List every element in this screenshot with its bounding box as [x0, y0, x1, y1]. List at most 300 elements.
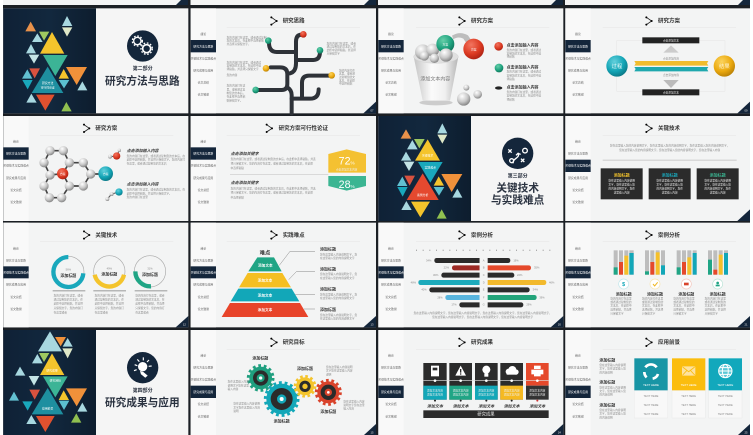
chart: pyramid: 添加文本: [258, 307, 273, 312]
text blocks: 择粘贴: [507, 97, 515, 101]
panel: three dark boxes: 添加标题: [710, 171, 726, 177]
sidebar navigation: 研究方法与思路: [381, 44, 401, 48]
ring labels: [60, 266, 158, 278]
heading: [603, 16, 736, 27]
gear labels: 文字您在这里输入内容: [326, 369, 353, 373]
text columns: 在这里或者: [135, 311, 149, 315]
text blocks: 点击添加输入内容: [507, 63, 539, 69]
chart: bucket of spheres: [414, 33, 484, 106]
text blocks: 此框中选择粘贴，并选择: [327, 48, 356, 52]
sidebar navigation: 研究成果与应用: [193, 68, 213, 72]
panel: three dark boxes: 文字，您在这里输入您: [656, 183, 683, 187]
text columns: 或者通过复制您的: [673, 300, 695, 304]
heading: [227, 16, 360, 27]
heading: 研究方案: [95, 124, 118, 132]
sidebar navigation: 绪论: [13, 246, 19, 250]
chart: butterfly bars: F: [483, 295, 485, 299]
heading: 实践难点: [283, 231, 305, 239]
corner page mark: [737, 102, 750, 113]
sidebar navigation: 论文总结: [385, 402, 397, 406]
sidebar navigation: 研究成果与应用: [381, 390, 401, 394]
text columns: 您的内容打在这里，或者: [54, 293, 83, 297]
callouts: 您在这里输入内容说明文字，您: [320, 252, 358, 256]
chart: pyramid: 添加文本: [258, 262, 273, 267]
sidebar navigation: 论文致谢: [198, 200, 209, 204]
results bar: 研究成果: [477, 411, 495, 418]
heading: 关键技术: [658, 124, 680, 132]
diagram: process loop: 结果: [719, 62, 730, 70]
slide: case analysis columns: [565, 223, 750, 327]
intro text: 您在这里输入您的内容说明文字，您在这里输入您的内容说明文字，您在这里输入内容: [619, 148, 720, 152]
text columns: 文本后，在此框中: [705, 304, 726, 308]
text blocks: 择粘贴，并选择只保留文字: [227, 67, 259, 71]
panel: dark triangle mosaic: 关键技术: [422, 154, 433, 158]
sidebar navigation: 研究方法与思路: [193, 259, 213, 263]
panel: three feature cards: TEXT HERE: [718, 403, 733, 407]
text columns: 只保留文字。您的内容打: [95, 306, 124, 310]
text columns: 只保留文字。您的内容打: [135, 306, 165, 310]
panel: three feature cards: [634, 358, 742, 418]
sidebar navigation: [565, 8, 591, 113]
panel: five result cards: 添加文本内容: [529, 389, 546, 393]
icon: printer: [531, 366, 543, 376]
sidebar navigation: 绪论: [575, 353, 581, 357]
heading: 关键技术: [95, 231, 118, 239]
text blocks: 点击添加输入内容: [507, 84, 539, 90]
text blocks: [599, 356, 626, 419]
sidebar navigation: 论文致谢: [572, 414, 584, 418]
sidebar navigation: 研究成果与应用: [568, 283, 588, 287]
sidebar navigation: [191, 116, 216, 221]
panel: three dark boxes: 文字，您在这里输入您: [608, 183, 635, 187]
ring labels: 49%: [107, 266, 113, 270]
sidebar navigation: 关键技术与实践难点: [378, 56, 404, 60]
ring labels: 添加标题: [60, 272, 76, 278]
panel: five result cards: 添加文本内容: [478, 393, 495, 397]
text blocks: 此框中选择粘贴，并选择只保留文字。您的内容打: [127, 158, 185, 162]
text blocks: 点击添加输入内容: [127, 148, 160, 153]
icon: light bulb: [127, 352, 158, 383]
text blocks: 点击添加关键字: [231, 151, 260, 156]
sidebar navigation: 研究方法与思路: [568, 366, 588, 370]
panel: dark triangle mosaic: 应用前景: [42, 407, 53, 411]
corner page mark: 25: [745, 430, 748, 434]
sidebar navigation: 研究方法与思路: [381, 259, 401, 263]
card captions: 添加文本: [478, 404, 495, 409]
sidebar navigation: 论文总结: [572, 402, 584, 406]
chart: butterfly bars: 22%: [444, 266, 450, 270]
heading: 案例分析: [658, 231, 680, 239]
icons: round badges: $: [622, 282, 625, 288]
chart: percentage badges: 72%: [339, 156, 355, 168]
text blocks: 贴保留文字。: [227, 98, 243, 102]
quadrant: lower-right slides: [378, 223, 750, 435]
gear: yellow: [295, 376, 315, 396]
sidebar navigation: 研究方法与思路: [568, 152, 588, 156]
gear labels: 您在这里输入内容说明: [326, 365, 353, 369]
panel: five result cards: 添加文本内容: [504, 389, 520, 393]
text columns: 您的内容打在这里，或者: [95, 293, 124, 297]
text blocks: 在这里，或者通过复制您的文本后: [127, 161, 167, 165]
text columns: 通过复制您的文本后，在: [95, 297, 124, 301]
chart: pyramid: 添加文本: [258, 292, 273, 297]
quadrant: lower-left slides: [3, 223, 376, 435]
corner page mark: [363, 316, 376, 327]
gear labels: 说明文字您在这里: [228, 383, 249, 387]
corner page mark: 24: [558, 430, 561, 434]
sidebar navigation: 绪论: [201, 246, 206, 250]
panel: three dark boxes: 您在这里输入内容说明: [656, 179, 683, 183]
text columns: 只保留文字: [610, 312, 624, 316]
chart: butterfly bars: 34%: [533, 288, 539, 292]
sidebar navigation: 论文致谢: [385, 414, 397, 418]
gear labels: 添加标题: [274, 418, 290, 424]
panel: three feature cards: TEXT HERE: [681, 412, 696, 416]
text blocks: 点击添加输入内容: [127, 181, 160, 186]
chart: butterfly bars: 48%: [411, 280, 417, 284]
panel: dark triangle mosaic: [378, 116, 471, 221]
icon: recycle: [644, 364, 658, 379]
ring labels: 31%: [147, 266, 153, 270]
panel: three dark boxes: 文字，您在这里输入您: [704, 183, 731, 187]
text columns: 您的内容打在这里: [705, 296, 726, 300]
sidebar navigation: 绪论: [388, 246, 394, 250]
text blocks: 复制您的文本后，在此框中选: [507, 73, 542, 77]
sidebar navigation: 论文致谢: [198, 414, 209, 418]
heading: 应用前景: [658, 338, 680, 346]
corner page mark: 15: [371, 430, 374, 434]
text blocks: 添加标题: [599, 379, 615, 385]
heading: 研究方案: [471, 17, 493, 25]
heading: [227, 124, 360, 135]
chart: butterfly bars: A: [483, 258, 485, 262]
sidebar navigation: 绪论: [201, 139, 206, 143]
text blocks: 复制您的文本后，在此框中选: [507, 94, 542, 98]
sidebar navigation: 关键技术与实践难点: [565, 271, 591, 275]
corner page mark: [176, 316, 188, 327]
panel: dark triangle mosaic: 研究目标: [50, 378, 61, 382]
text blocks: 制您的文本后，: [227, 91, 245, 95]
slide: key technology rings: [3, 223, 188, 327]
text blocks: 此框中选择粘贴，并选择只保留文字。: [127, 191, 172, 195]
icon: cloud: [506, 366, 519, 375]
sidebar navigation: 关键技术与实践难点: [565, 378, 591, 382]
callouts: 添加标题: [320, 286, 336, 292]
text blocks: 这里，或者通: [339, 72, 355, 76]
text blocks: 中选择粘贴: [231, 166, 244, 170]
sidebar navigation: 研究成果与应用: [6, 176, 26, 180]
chart: butterfly bars: B: [483, 266, 485, 270]
text columns: 文本后，在此框中: [642, 304, 664, 308]
sidebar navigation: 论文致谢: [10, 307, 22, 311]
corner page mark: [551, 316, 563, 327]
chart: butterfly bars: 29%: [526, 303, 532, 307]
text columns: 此框中选择粘贴，并选择: [95, 302, 124, 306]
diagram: process loop: [606, 37, 735, 95]
callouts: 在这里输入您的内容说明文字: [320, 296, 355, 300]
text columns: 添加标题: [647, 290, 663, 296]
corner page mark: 07: [371, 108, 374, 112]
text blocks: 点击添加输入内容: [507, 42, 539, 48]
icon: document: [431, 366, 439, 376]
sidebar navigation: [3, 223, 29, 327]
sidebar navigation: 绪论: [575, 246, 581, 250]
sidebar navigation: 研究方法与思路: [568, 44, 588, 48]
sidebar navigation: [565, 223, 591, 327]
sidebar navigation: [191, 330, 216, 435]
panel: three dark boxes: 这里输入内容: [614, 191, 630, 195]
sidebar navigation: 研究成果与应用: [568, 68, 588, 72]
gear labels: [228, 355, 365, 424]
heading: [603, 124, 736, 135]
text columns: 此框中选择粘贴，并选择: [135, 302, 165, 306]
panel: three dark boxes: 添加标题: [614, 171, 630, 177]
card captions: 添加文本: [427, 404, 444, 409]
sidebar navigation: 论文总结: [198, 81, 209, 85]
chart: butterfly bars: 34%: [426, 258, 432, 262]
sidebar navigation: 关键技术与实践难点: [191, 164, 216, 168]
callouts: 在这里输入您的内容说明文字: [320, 256, 355, 260]
heading: 研究方案: [658, 17, 680, 25]
text columns: 或者通过复制您的: [642, 300, 664, 304]
sidebar navigation: 研究方法与思路: [381, 366, 401, 370]
corner page mark: 21: [745, 322, 748, 326]
panel: three feature cards: TEXT HERE: [681, 383, 697, 387]
text blocks: 的内容说明: [599, 393, 613, 397]
text columns: 文本后，在此框中: [610, 304, 632, 308]
text columns: 您的内容打在这里: [610, 296, 632, 300]
text blocks: 您的内容打在这里，或者通过复制您的文本后，在此框中选择粘贴，并选: [231, 157, 316, 161]
sidebar navigation: 研究方法与思路: [6, 152, 26, 156]
text blocks: 您的内容打在这里，或者通过: [507, 70, 542, 74]
panel: five result cards: 添加文本内容: [478, 389, 495, 393]
chart: butterfly bars: C: [483, 273, 485, 277]
chart: branching tree: [252, 31, 335, 113]
panel: three feature cards: TEXT HERE: [718, 412, 733, 416]
text blocks: 点击添加关键字: [231, 180, 260, 185]
gear labels: 文字您在这里输入内容: [233, 405, 260, 409]
text columns: 选择粘贴，并选择: [610, 307, 632, 311]
chart: bucket of spheres: 添加文本内容: [420, 75, 450, 82]
panel: three dark boxes: 您在这里输入内容说明: [608, 179, 635, 183]
panel: five result cards: 添加文本内容: [453, 389, 469, 393]
text blocks: 您在这里输入内容说明: [599, 363, 626, 367]
chart: butterfly bars: [411, 250, 555, 308]
diagram: process loop: 点击添加内容: [663, 56, 679, 60]
text columns: 通过复制您的文本后，在: [135, 297, 165, 301]
heading: [40, 230, 173, 242]
sidebar navigation: [3, 116, 29, 221]
diagram: process loop: 过程: [612, 62, 623, 70]
text columns: 此框中选择粘贴，并选择: [54, 302, 83, 306]
corner page mark: [363, 102, 376, 113]
panel: three feature cards: TEXT HERE: [644, 394, 659, 398]
chart: butterfly bars: 17%: [451, 303, 457, 307]
icons: round badges: [619, 279, 723, 289]
heading: 研究目标: [283, 338, 305, 346]
text blocks: 里，或者通过复: [227, 87, 246, 91]
panel: three dark boxes: 的内容说明文字，您在: [656, 187, 683, 191]
caption: 您在这里输入内容说明文字，您在这里输入内容说明文字，您在这里输入内容说明文字: [432, 315, 533, 319]
text blocks: 您的内容: [227, 73, 238, 77]
sidebar navigation: 研究方法与思路: [6, 259, 26, 263]
chart: butterfly bars: 19%: [513, 258, 519, 262]
panel: three dark boxes: 这里输入内容: [710, 191, 726, 195]
text blocks: 择只保留文字。您的内容打在这里，或者通过复制您的文本后，在此框: [231, 161, 313, 165]
section title: 与实践难点: [491, 194, 545, 207]
chart: pyramid: 添加文本: [258, 277, 273, 282]
callouts: 添加标题: [320, 306, 336, 312]
slide: application outlook: [565, 330, 750, 435]
text blocks: 您的文本后，在此框中选择粘贴: [227, 39, 264, 43]
caption: [414, 311, 552, 319]
sidebar navigation: 关键技术与实践难点: [378, 271, 404, 275]
panel: five result cards: 添加文本内容: [427, 393, 443, 397]
text columns: 您的内容打在这里: [673, 296, 695, 300]
chart: percentage badges: [328, 149, 366, 191]
chart: molecule: [39, 146, 123, 202]
slide: case analysis bars: [378, 223, 563, 327]
card captions: 添加文本: [504, 404, 521, 409]
text blocks: [494, 42, 542, 101]
intro text: [603, 144, 737, 161]
panel: dark triangle mosaic: 实践难点: [425, 165, 436, 169]
section title: 关键技术: [496, 181, 539, 194]
section label: 第三部分: [508, 173, 528, 180]
gear labels: 您在这里输入内容: [228, 380, 249, 384]
heading: [40, 124, 173, 135]
sidebar navigation: 绪论: [201, 32, 206, 36]
heading: 研究方案可行性论证: [279, 124, 329, 132]
text blocks: [227, 35, 356, 102]
text columns: 选择粘贴，并选择: [673, 307, 695, 311]
sidebar navigation: [565, 116, 591, 221]
callouts: 添加标题: [320, 246, 336, 252]
diagram: process loop: 点击添加文本: [663, 38, 679, 42]
sidebar navigation: 绪论: [201, 353, 206, 357]
ring labels: 56%: [66, 267, 72, 271]
chart: percentage badges: 28%: [339, 179, 355, 191]
panel: dark triangle mosaic: [3, 8, 96, 113]
heading: [603, 230, 736, 242]
sidebar navigation: 研究成果与应用: [193, 390, 213, 394]
chart: pyramid: 难点: [260, 249, 271, 257]
text columns: 或者通过复制您的: [705, 300, 726, 304]
text blocks: 添加标题: [599, 401, 615, 407]
slide: two-way process: [565, 8, 750, 113]
chart: butterfly bars: 30%: [433, 273, 439, 277]
slide: key technology boxes: [565, 116, 750, 221]
sidebar navigation: 论文致谢: [572, 93, 584, 97]
card captions: [427, 400, 546, 409]
chart: butterfly bars: D: [483, 280, 485, 284]
section title: [491, 181, 545, 207]
callouts: 在这里输入您的内容说明文字: [320, 276, 355, 280]
heading: [227, 230, 360, 242]
branch endpoints: [252, 31, 335, 93]
text blocks: 您的内容打在这里，或者通过: [507, 48, 542, 52]
gear labels: 说明: [233, 409, 239, 413]
gear labels: 说明: [326, 372, 332, 376]
sidebar navigation: 论文总结: [385, 81, 397, 85]
sidebar navigation: 绪论: [388, 32, 394, 36]
slide: section three cover: [378, 116, 563, 221]
sidebar navigation: [565, 330, 591, 435]
sidebar navigation: 论文致谢: [10, 200, 22, 204]
heading: [603, 338, 736, 349]
slide: research goals gears: [191, 330, 376, 435]
sidebar navigation: 论文总结: [572, 295, 584, 299]
text columns: 在这里或者: [54, 311, 67, 315]
panel: three dark boxes: 的内容说明文字，您在: [608, 187, 635, 191]
callouts: [320, 246, 358, 321]
slide: bucket plan: [378, 8, 563, 113]
text blocks: 中选择粘贴: [339, 82, 353, 86]
quadrant: upper-right slides: [378, 8, 750, 221]
intro text: 您在这里输入您的内容说明文字，您在这里输入您的内容说明文字，您在这里输入您的内容说明文字，: [610, 144, 729, 148]
callouts: 您在这里输入内容说明文字，您: [320, 292, 358, 296]
gear labels: 输入内容: [343, 407, 354, 411]
sidebar navigation: 绪论: [13, 139, 19, 143]
text blocks: 择只保留文字。您的内容打在这里，或者通过复制您的文本后，在此框: [231, 191, 313, 195]
gear labels: 您在这里输入内容说明: [233, 402, 260, 406]
card captions: 添加文本: [529, 404, 546, 409]
gear: green: [248, 366, 273, 390]
text blocks: 您在这里输入内容说明: [599, 408, 626, 412]
chart: progress rings: [53, 256, 166, 288]
icon: gears: [127, 30, 158, 62]
text blocks: 只保留文字: [327, 51, 340, 55]
sidebar navigation: 论文致谢: [198, 93, 209, 97]
sidebar navigation: 论文总结: [198, 188, 209, 192]
sidebar navigation: 关键技术与实践难点: [191, 271, 216, 275]
text columns: [53, 290, 167, 315]
section title: 研究成果与应用: [105, 396, 180, 409]
sidebar navigation: 研究方法与思路: [193, 44, 213, 48]
heading: [416, 230, 549, 242]
sidebar navigation: 关键技术与实践难点: [191, 378, 216, 382]
slide: molecule plan: [3, 116, 188, 221]
gear labels: 您在这里输入内容: [343, 399, 365, 403]
text columns: 文本后，在此框中: [673, 304, 695, 308]
text blocks: 您的内容打在这里，或者通过: [507, 90, 542, 94]
sidebar navigation: 关键技术与实践难点: [3, 164, 29, 168]
chart: butterfly bars: E: [483, 288, 485, 292]
heading: 研究成果: [471, 338, 493, 346]
gear: teal: [265, 383, 298, 415]
chart: molecule: 方案: [103, 172, 109, 176]
corner page mark: 13: [371, 322, 374, 326]
heading: [227, 338, 360, 349]
sidebar navigation: 关键技术与实践难点: [3, 271, 29, 275]
text blocks: 添加标题: [599, 356, 615, 362]
text columns: [610, 290, 726, 316]
text blocks: 复制您的文本后，在此框中选: [507, 51, 542, 55]
sidebar navigation: 研究成果与应用: [381, 283, 401, 287]
sidebar navigation: 研究方法与思路: [193, 152, 213, 156]
corner page mark: [364, 424, 376, 435]
sidebar navigation: [378, 223, 404, 327]
corner page mark: [737, 209, 750, 221]
sidebar navigation: 论文总结: [10, 295, 22, 299]
slide: feasibility: [191, 116, 376, 221]
text columns: 只保留文字: [673, 312, 687, 316]
card captions: 添加文本: [453, 404, 470, 409]
corner page mark: 20: [558, 322, 561, 326]
sidebar navigation: 研究成果与应用: [193, 176, 213, 180]
sidebar navigation: 论文致谢: [385, 307, 397, 311]
text blocks: 您的内容打在这里，或者: [327, 41, 356, 45]
